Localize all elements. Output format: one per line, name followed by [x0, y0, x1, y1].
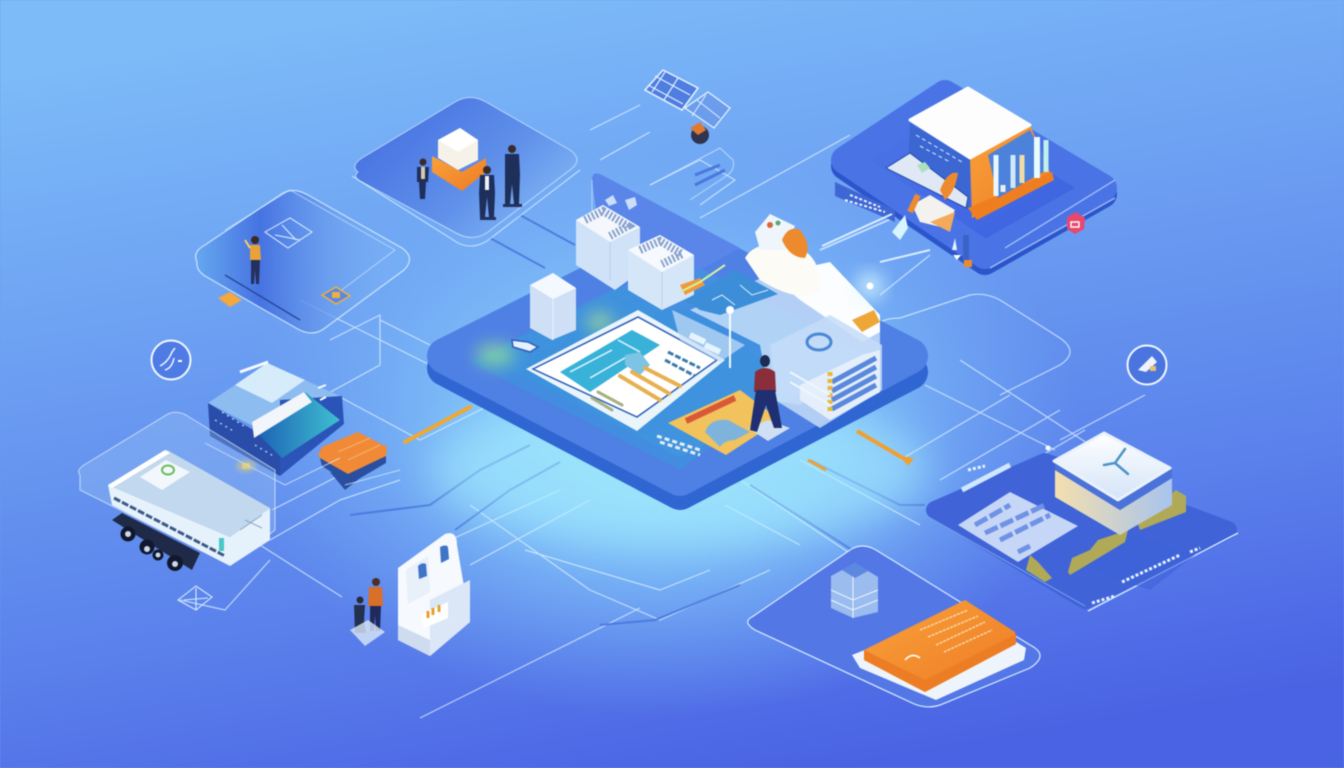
icon: small yellow chip — [322, 287, 350, 304]
arrow: right orange connector — [808, 431, 914, 470]
cube top — [910, 88, 1030, 158]
chart window — [988, 130, 1050, 198]
wheels chassis — [112, 513, 200, 571]
person with yellow shirt — [245, 236, 261, 284]
side text strip — [835, 182, 895, 222]
central dashboard screen — [526, 310, 725, 431]
platform — [935, 462, 1228, 600]
back panel — [592, 173, 740, 270]
glass stack icon — [831, 563, 878, 618]
glass shelf building — [770, 315, 882, 428]
spark — [855, 271, 885, 301]
panel: trailer server unit — [79, 412, 275, 571]
lower cylinder block — [910, 195, 972, 267]
cube right face — [970, 125, 1052, 218]
arrow: left orange connector — [405, 407, 470, 442]
person standing — [748, 355, 790, 441]
panel: left analytics — [196, 190, 410, 333]
label marks — [962, 465, 1200, 603]
blue blueprint sheet — [680, 265, 778, 315]
panel: top server icons — [645, 70, 734, 200]
helper — [350, 596, 385, 646]
small label chip — [512, 340, 538, 352]
panel: left factory building — [205, 362, 400, 490]
screen — [958, 492, 1078, 562]
worker — [368, 578, 383, 631]
server blocks — [576, 205, 694, 310]
data cables — [350, 215, 925, 625]
panel: bottom-right orange card — [748, 546, 1040, 707]
plants — [1026, 490, 1186, 582]
white tray — [852, 610, 1026, 700]
icon: right circle — [1128, 346, 1166, 384]
small circuit icon — [178, 586, 212, 610]
panel: central platform — [430, 173, 930, 545]
small chips row — [657, 436, 700, 455]
steps and connector post — [672, 306, 745, 368]
orange floor tile — [668, 390, 780, 455]
building body — [208, 403, 280, 476]
white building — [1054, 433, 1172, 535]
person — [503, 145, 522, 207]
building back glass — [208, 363, 342, 440]
kiosk — [398, 533, 470, 656]
lightning connector — [822, 214, 930, 262]
orange container — [318, 432, 387, 490]
trailer top — [108, 450, 270, 537]
panel: top-right analytics building — [822, 88, 1115, 268]
white machinery bridge — [680, 214, 880, 405]
trailer side — [108, 485, 270, 566]
green glow spots — [475, 312, 614, 367]
yellow glow chip — [236, 460, 256, 472]
platform top surface — [445, 238, 910, 478]
orange card — [864, 600, 1016, 692]
panel: right building platform — [925, 433, 1238, 611]
platform base side — [445, 250, 910, 492]
lower surface tint — [470, 285, 800, 470]
shelf — [886, 153, 968, 208]
connector network lines — [180, 105, 1145, 718]
person — [417, 158, 429, 199]
person — [479, 166, 496, 220]
panel: kiosk and worker — [350, 533, 470, 656]
tower block — [530, 273, 576, 340]
icon: red badge — [1067, 212, 1085, 234]
icon: orange and white cube — [432, 128, 486, 191]
icon: left circle — [152, 340, 190, 380]
panel: top-left team — [352, 98, 580, 246]
platform — [845, 100, 1103, 261]
icon: amber chip — [218, 292, 242, 307]
cube left face — [908, 123, 970, 210]
platform soft shadow glow — [430, 395, 930, 545]
